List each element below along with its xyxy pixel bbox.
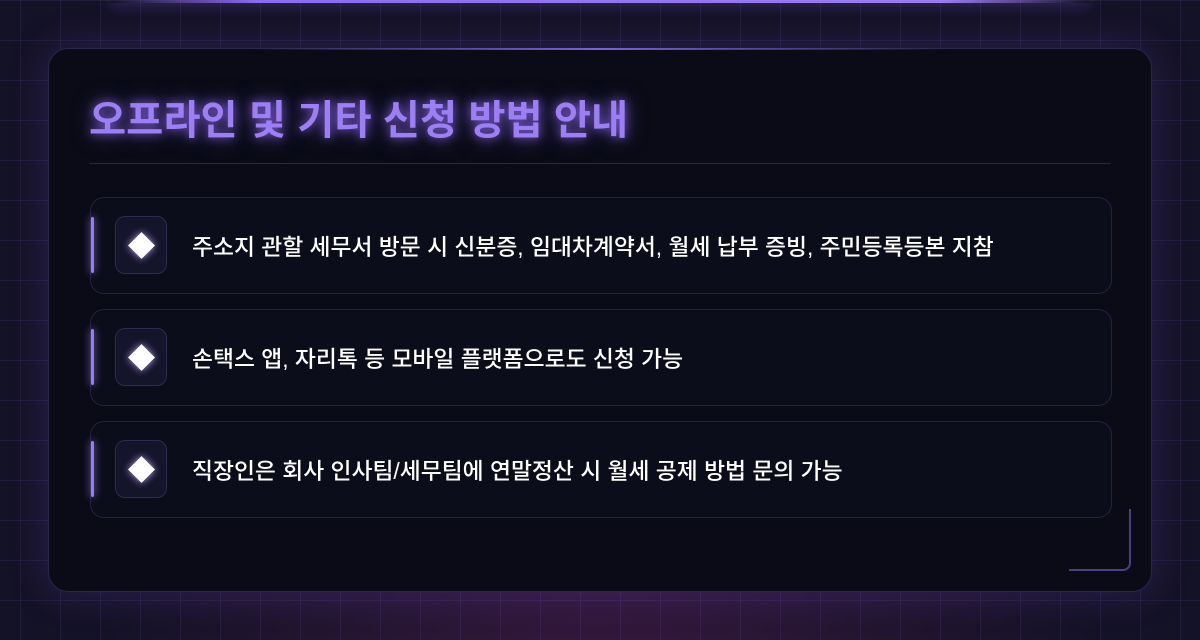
icon: diamond (115, 328, 167, 386)
item 1 (90, 197, 1112, 294)
item 2 (90, 309, 1112, 406)
text 2: 손택스 앱, 자리톡 등 모바일 플랫폼으로도 신청 가능 (192, 346, 683, 372)
text 3: 직장인은 회사 인사팀/세무팀에 연말정산 시 월세 공제 방법 문의 가능 (192, 458, 843, 484)
title: 오프라인 및 기타 신청 방법 안내 (89, 97, 628, 143)
item 3 (90, 421, 1112, 518)
icon: diamond (115, 440, 167, 498)
panel: main card (48, 48, 1152, 592)
text 1: 주소지 관할 세무서 방문 시 신분증, 임대차계약서, 월세 납부 증빙, 주민등록등본 지참 (192, 234, 994, 260)
icon: diamond (115, 216, 167, 274)
